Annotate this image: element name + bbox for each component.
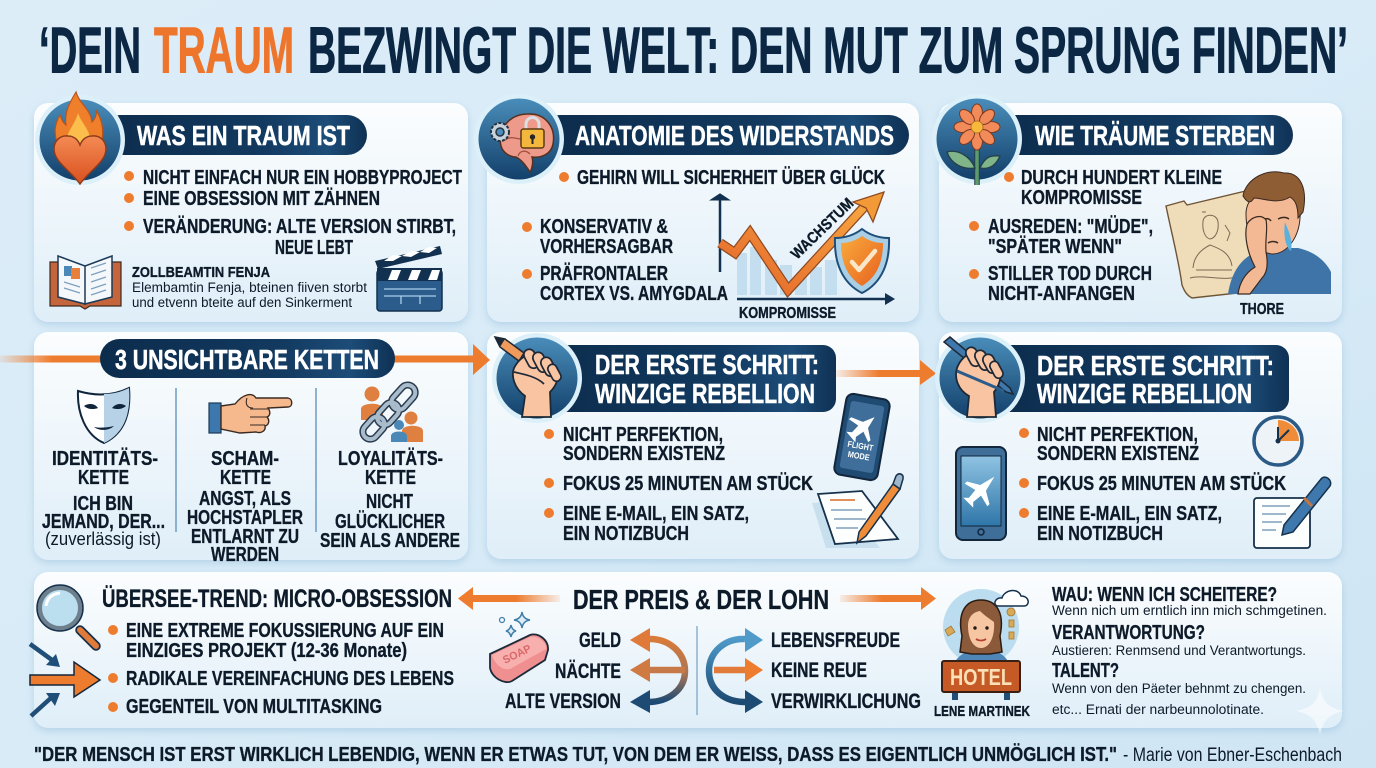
icon: phone flight mode: MODE <box>847 449 871 463</box>
icon: phone <box>956 447 1006 540</box>
bullet list: PRÄFRONTALER <box>540 262 668 285</box>
text block: faq: VERANTWORTUNG? <box>1052 622 1205 644</box>
heading: was ein traum ist: WAS EIN TRAUM IST <box>137 120 350 151</box>
bullet list <box>124 166 462 259</box>
bullet list: KONSERVATIV & <box>540 215 668 238</box>
bullet list: EINE E-MAIL, EIN SATZ, <box>563 502 749 525</box>
labels: price: ALTE VERSION <box>505 690 621 713</box>
arrow: left <box>458 587 560 610</box>
icon: converging arrows <box>30 644 100 716</box>
chain 2: schamkette: HOCHSTAPLER <box>187 507 303 529</box>
text block: faq: WAU: WENN ICH SCHEITERE? <box>1052 584 1277 606</box>
bullet list <box>544 423 813 545</box>
panel: was ein traum ist <box>34 92 468 322</box>
heading: der erste schritt <box>540 345 836 412</box>
icon: soap <box>490 612 548 682</box>
bullet list: GEGENTEIL VON MULTITASKING <box>126 695 382 718</box>
heading: was ein traum ist <box>100 115 367 155</box>
chain 3: loyalitätskette: GLÜCKLICHER <box>335 510 445 533</box>
bullet list: EINE E-MAIL, EIN SATZ, <box>1037 502 1222 525</box>
chain 1: identitätskette: IDENTITÄTS- <box>52 447 158 470</box>
bullet list: VERÄNDERUNG: ALTE VERSION STIRBT, <box>143 215 456 238</box>
arrow head into panel <box>473 344 490 375</box>
icon: fist with pen <box>935 333 1025 423</box>
labels: price: GELD <box>579 629 621 652</box>
labels: reward <box>771 629 921 713</box>
text block: faq: Wenn von den Päeter behnmt zu chengen. <box>1052 681 1306 696</box>
bullet list: NICHT PERFEKTION, <box>1037 423 1198 446</box>
heading: übersee-trend: ÜBERSEE-TREND: MICRO-OBSESSION <box>102 584 452 613</box>
illustration: lene with hotel sign <box>942 589 1028 700</box>
bullet list: NICHT PERFEKTION, <box>563 423 723 446</box>
chain 1: identitätskette: (zuverlässig ist) <box>45 529 161 549</box>
bullet list: "SPÄTER WENN" <box>988 235 1122 258</box>
illustration: lene with hotel sign: HOTEL <box>950 664 1012 690</box>
chain 3: loyalitätskette: KETTE <box>365 467 416 489</box>
chain 2: schamkette: ENTLARNT ZU <box>191 526 299 548</box>
heading: anatomie des widerstands <box>540 115 909 155</box>
text block: faq: TALENT? <box>1052 660 1119 682</box>
bullet list: EINE OBSESSION MIT ZÄHNEN <box>143 187 380 210</box>
bullet list: FOKUS 25 MINUTEN AM STÜCK <box>1037 472 1286 495</box>
text block: zollbeamtin fenja: ZOLLBEAMTIN FENJA <box>132 264 270 281</box>
arrow to next panel <box>836 360 936 385</box>
icon: clock <box>1254 417 1302 465</box>
icon: sparkle <box>1296 688 1344 735</box>
icon: open book <box>50 256 121 309</box>
illustration: crying man with parchment <box>1166 172 1331 298</box>
bullet list: EINE EXTREME FOKUSSIERUNG AUF EIN <box>126 619 444 642</box>
title: TRAUM <box>154 14 294 86</box>
chain 2: schamkette: SCHAM- <box>211 448 279 470</box>
bullet list <box>969 166 1222 305</box>
panel: anatomie des widerstands <box>474 94 919 322</box>
chain 2: schamkette: ANGST, ALS <box>199 488 291 510</box>
chain 3: loyalitätskette <box>320 447 460 552</box>
bullet list: SONDERN EXISTENZ <box>1037 442 1199 465</box>
icon: brain with lock <box>474 94 564 184</box>
panel: der erste schritt 2 <box>935 332 1342 559</box>
text block: faq: Wenn nich um erntlich inn mich schmgetinen. <box>1052 603 1327 618</box>
heading: der erste schritt: WINZIGE REBELLION <box>1037 378 1252 409</box>
bullet list <box>1019 423 1286 545</box>
arrow: right <box>840 587 936 610</box>
labels: price: NÄCHTE <box>555 660 621 683</box>
bullet list: SONDERN EXISTENZ <box>563 442 725 465</box>
arrow: left tail <box>0 356 104 362</box>
bullet list: GEHIRN WILL SICHERHEIT ÜBER GLÜCK <box>577 166 885 189</box>
label: thore: THORE <box>1240 301 1284 318</box>
text block: faq: etc... Ernati der narbeunnolotinate. <box>1052 702 1264 717</box>
panel: 3 unsichtbare ketten <box>0 332 475 566</box>
icon: soap: SOAP <box>501 643 533 667</box>
heading: der erste schritt: DER ERSTE SCHRITT: <box>1037 350 1274 381</box>
bullet list: NICHT-ANFANGEN <box>988 282 1135 305</box>
heading: wie träume sterben <box>990 115 1293 155</box>
chain 2: schamkette: KETTE <box>220 467 271 489</box>
icon: chain and people <box>360 382 423 442</box>
bullet list: RADIKALE VEREINFACHUNG DES LEBENS <box>126 667 454 690</box>
chain 1: identitätskette: ICH BIN <box>73 493 133 515</box>
text block: faq: Austieren: Renmsend und Verantwortungs. <box>1052 643 1306 658</box>
text block: zollbeamtin fenja: und etvenn bteite auf den Sinkerment <box>132 295 352 310</box>
bullet list: CORTEX VS. AMYGDALA <box>540 282 728 305</box>
text block: faq <box>1052 584 1327 717</box>
text block: zollbeamtin fenja: Elembamtin Fenja, bteinen fiiven storbt <box>132 280 367 295</box>
bullet list: VORHERSAGBAR <box>540 235 673 258</box>
icon: magnifier <box>37 585 96 646</box>
labels: reward: KEINE REUE <box>771 659 867 682</box>
arrows: reward curves <box>709 628 763 713</box>
chart: growth line with shield <box>714 192 895 322</box>
chain 3: loyalitätskette: SEIN ALS ANDERE <box>320 530 460 552</box>
panel: wie träume sterben <box>932 94 1342 322</box>
bullet list <box>108 619 454 718</box>
heading: wie träume sterben: WIE TRÄUME STERBEN <box>1035 120 1275 151</box>
heading: anatomie des widerstands: ANATOMIE DES WIDERSTANDS <box>575 120 894 151</box>
quote: "DER MENSCH IST ERST WIRKLICH LEBENDIG, WENN ER ETWAS TUT, VON DEM ER WEISS, DASS ES EIGENTLICH UNMÖGLICH IST." <box>34 743 1117 766</box>
bullet list: FOKUS 25 MINUTEN AM STÜCK <box>563 472 813 495</box>
panel: bottom strip <box>30 572 1344 735</box>
icon: note and pen <box>812 474 903 548</box>
bullet list: AUSREDEN: "MÜDE", <box>988 215 1153 238</box>
icon: flower <box>932 94 1022 185</box>
labels: reward: VERWIRKLICHUNG <box>771 690 921 713</box>
bullet list: NEUE LEBT <box>275 236 353 259</box>
chain 3: loyalitätskette: NICHT <box>366 491 413 513</box>
arrows: price curves <box>630 628 685 713</box>
icon: phone flight mode <box>833 393 891 481</box>
heading: der erste schritt: WINZIGE REBELLION <box>595 378 815 409</box>
heading: 3 unsichtbare ketten <box>100 339 395 378</box>
heading: der preis und der lohn: DER PREIS & DER LOHN <box>573 584 829 615</box>
text block: zollbeamtin fenja <box>132 264 367 310</box>
icon: mask <box>78 388 129 443</box>
bullet list: EIN NOTIZBUCH <box>563 522 689 545</box>
bullet list <box>522 166 885 305</box>
labels: reward: LEBENSFREUDE <box>771 629 900 652</box>
chain 3: loyalitätskette: LOYALITÄTS- <box>338 447 443 470</box>
bullet list: NICHT EINFACH NUR EIN HOBBYPROJECT <box>143 166 462 189</box>
panel: der erste schritt 1 <box>473 332 936 559</box>
arrow: right tail <box>390 356 475 362</box>
labels: price <box>505 629 621 713</box>
icon: fist with pen <box>492 333 582 423</box>
bullet list: DURCH HUNDERT KLEINE <box>1021 166 1222 189</box>
bullet list: KOMPROMISSE <box>1021 186 1142 209</box>
chain 2: schamkette <box>187 448 303 566</box>
chain 2: schamkette: WERDEN <box>211 544 279 566</box>
chart: growth line with shield: WACHSTUM <box>788 195 857 263</box>
chain 1: identitätskette: JEMAND, DER... <box>42 511 165 533</box>
heading: der erste schritt: DER ERSTE SCHRITT: <box>595 349 819 380</box>
icon: phone flight mode: FLIGHT <box>847 439 875 453</box>
title: ‘DEIN <box>39 14 141 86</box>
heading: der erste schritt <box>990 345 1289 412</box>
chain 1: identitätskette: KETTE <box>78 467 129 489</box>
icon: flaming heart <box>35 92 125 185</box>
bullet list: STILLER TOD DURCH <box>988 262 1152 285</box>
heading: 3 unsichtbare ketten: 3 UNSICHTBARE KETTEN <box>115 344 379 375</box>
bullet list: EIN NOTIZBUCH <box>1037 522 1163 545</box>
chain 1: identitätskette <box>42 447 165 549</box>
bullet list: EINZIGES PROJEKT (12-36 Monate) <box>126 639 407 662</box>
icon: notepad and pen <box>1254 477 1331 548</box>
label: lene martinek: LENE MARTINEK <box>934 704 1030 720</box>
icon: pointing hand <box>209 395 292 433</box>
icon: clapperboard <box>375 246 442 311</box>
chart: growth line with shield: KOMPROMISSE <box>739 305 836 322</box>
